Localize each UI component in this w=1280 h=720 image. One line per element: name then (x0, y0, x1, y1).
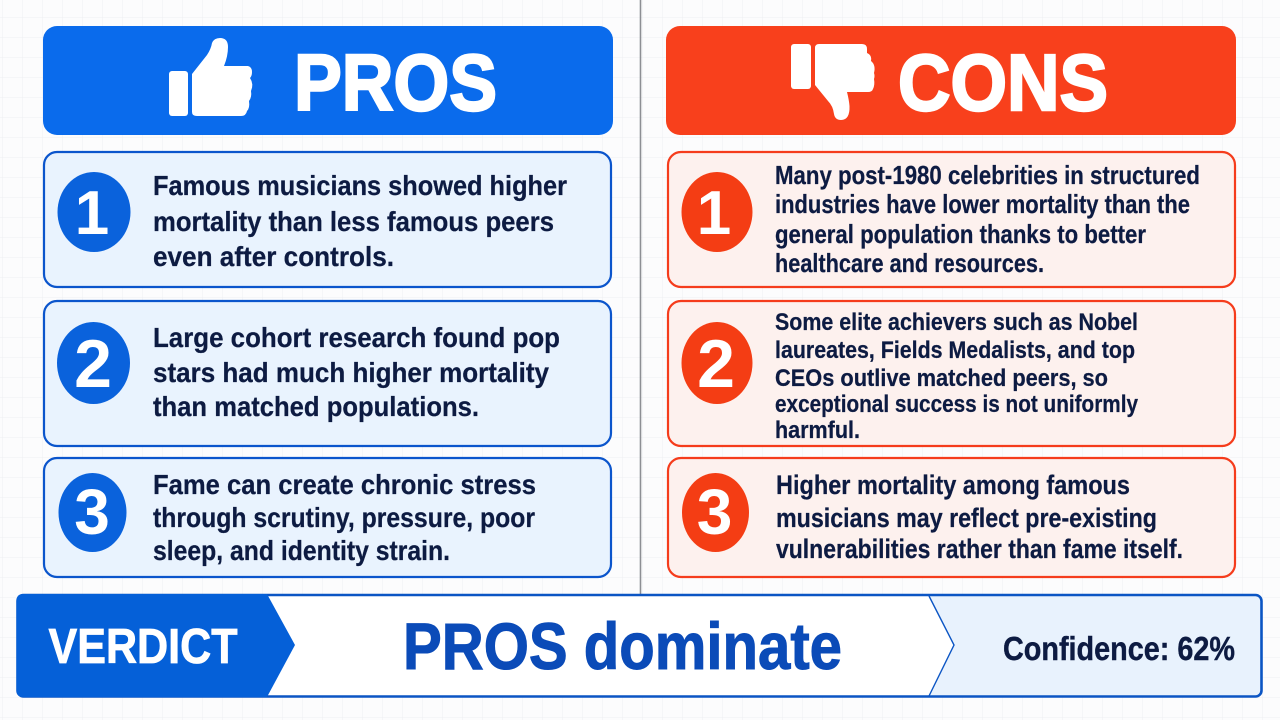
cons card 3: Higher mortality among famous (776, 470, 1130, 500)
cons card 1 (668, 152, 1235, 287)
pros header (43, 26, 613, 135)
cons card 2: laureates, Fields Medalists, and top (775, 337, 1135, 364)
pros heading: PROS (294, 38, 497, 127)
pros card 2 (44, 301, 611, 446)
cons card 2: harmful. (775, 417, 860, 444)
verdict bar (16, 594, 1262, 697)
cons card 1: 1 (697, 179, 731, 248)
pros card 2: Large cohort research found pop (153, 322, 560, 353)
pros card 2: 2 (74, 326, 112, 402)
pros card 1: Famous musicians showed higher (153, 170, 567, 201)
cons card 3 (668, 458, 1235, 577)
cons card 3: 3 (697, 476, 732, 548)
cons card 1: Many post-1980 celebrities in structured (775, 160, 1200, 190)
pros card 1 (44, 152, 611, 287)
verdict label (16, 594, 295, 697)
pros card 1: mortality than less famous peers (153, 206, 554, 237)
pros card 1: even after controls. (153, 241, 394, 272)
pros card 3: sleep, and identity strain. (153, 535, 450, 566)
confidence segment (929, 596, 1261, 696)
panel: cons (666, 26, 1236, 577)
cons card 3: musicians may reflect pre-existing (776, 503, 1157, 533)
icon: thumbs down (791, 44, 875, 120)
pros card 2: stars had much higher mortality (153, 357, 549, 388)
cons card 2: 2 (697, 326, 735, 402)
pros card 1: 1 (75, 179, 109, 248)
cons card 2 (668, 301, 1235, 446)
cons card 2: CEOs outlive matched peers, so (775, 365, 1108, 392)
cons card 1: general population thanks to better (775, 219, 1146, 249)
verdict label: VERDICT (48, 620, 238, 674)
panel: pros (43, 26, 613, 577)
cons card 3: vulnerabilities rather than fame itself. (776, 534, 1183, 564)
cons card 2: exceptional success is not uniformly (775, 391, 1139, 418)
cons heading: CONS (898, 38, 1108, 127)
verdict result: PROS dominate (403, 609, 842, 683)
cons card 1: healthcare and resources. (775, 248, 1044, 278)
pros card 2: than matched populations. (153, 391, 479, 422)
cons card 1: industries have lower mortality than the (775, 189, 1190, 219)
pros card 3: Fame can create chronic stress (153, 469, 536, 500)
pros card 3: through scrutiny, pressure, poor (153, 502, 535, 533)
icon: thumbs up (169, 38, 252, 116)
cons header (666, 26, 1236, 135)
pros card 3: 3 (74, 476, 110, 548)
pros card 3 (44, 458, 611, 577)
cons card 2: Some elite achievers such as Nobel (775, 309, 1138, 336)
confidence segment: Confidence: 62% (1003, 630, 1235, 667)
